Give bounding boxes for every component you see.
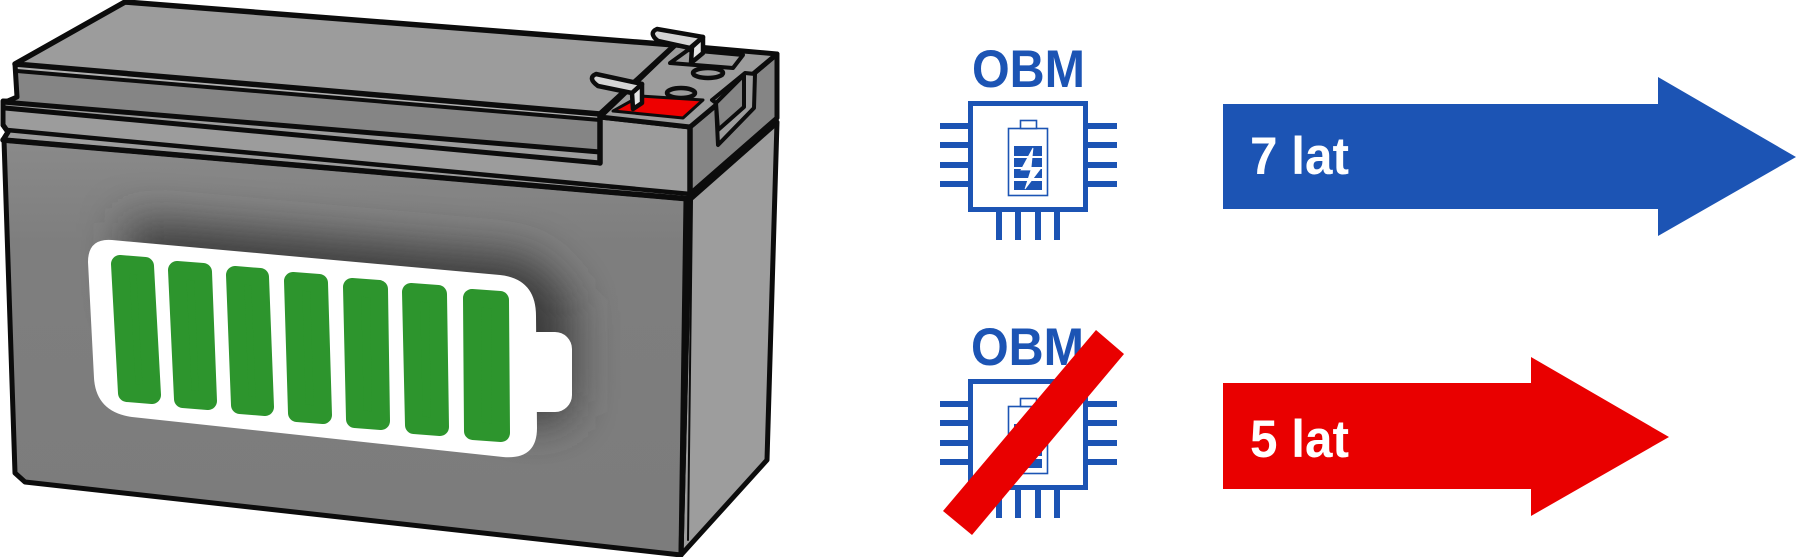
battery cells: [1014, 424, 1042, 468]
battery outline: [1008, 406, 1048, 474]
bar 7: [472, 298, 501, 433]
notch outer: [712, 73, 755, 145]
notch inner: [716, 75, 744, 130]
handle notch: [712, 73, 755, 145]
recessed strip: [3, 70, 600, 151]
OBM chip icon (crossed out): [940, 318, 1124, 535]
chip pins: [940, 123, 1117, 240]
bar 2: [177, 270, 208, 401]
lightning bolt: [1021, 148, 1041, 189]
hole back: [693, 68, 723, 78]
red arrow: 5 years: [1223, 357, 1669, 516]
red slash: [943, 330, 1124, 535]
battery right face: [681, 122, 777, 555]
ridge line: [692, 124, 777, 199]
arrow label: 7 lat: [1250, 127, 1349, 186]
symbol nub: [520, 332, 572, 412]
red positive terminal area: [613, 96, 703, 118]
hole front: [667, 88, 695, 98]
small battery icon: [1008, 398, 1048, 474]
block corner line: [687, 127, 693, 197]
lower casing line 1: [7, 130, 690, 194]
right block top: [600, 45, 777, 127]
front edge line: [681, 199, 686, 555]
heading OBM: OBM: [972, 40, 1085, 99]
right block side: [690, 54, 777, 194]
charge symbol: [88, 240, 572, 457]
bar 1: [120, 264, 152, 395]
upper lid top: [15, 2, 675, 114]
lower casing line 2: [3, 140, 690, 199]
bar 4: [293, 281, 323, 415]
left silhouette: [3, 64, 17, 140]
lid lower line: [17, 71, 600, 120]
front terminal: [592, 74, 642, 109]
chip body: [970, 104, 1086, 210]
arrow shape: [1223, 357, 1669, 516]
bar 5: [352, 287, 381, 421]
illustration: battery: [3, 2, 777, 555]
battery cells: [1014, 146, 1042, 190]
arrow shape: [1223, 77, 1796, 236]
back terminal: [653, 29, 703, 63]
strip end line: [597, 113, 603, 163]
tab: [691, 37, 703, 63]
front edge thin line: [688, 200, 692, 540]
back terminal recess: [670, 50, 743, 68]
symbol body: [88, 240, 537, 457]
light band of the casing: [3, 101, 690, 199]
heading OBM: OBM: [971, 318, 1084, 377]
arrow label: 5 lat: [1250, 410, 1349, 469]
bar 6: [411, 292, 440, 427]
small battery icon: [1008, 120, 1048, 196]
blue arrow: 7 years: [1223, 77, 1796, 236]
strip lower line 1: [3, 102, 600, 152]
battery cap: [1020, 398, 1036, 406]
strip lower line 2: [5, 108, 600, 163]
bar 3: [235, 275, 265, 407]
shadow behind charge symbol: [128, 222, 572, 425]
battery outline: [1008, 128, 1048, 196]
battery front face: [4, 140, 690, 555]
recessed strip gap: [15, 64, 600, 124]
chip body: [970, 382, 1086, 488]
tab: [632, 84, 642, 109]
green charge bars: [120, 264, 501, 433]
blade: [592, 74, 642, 93]
chip pins: [940, 401, 1117, 518]
blade: [653, 29, 703, 48]
battery cap: [1020, 120, 1036, 128]
OBM chip icon (top): [940, 40, 1117, 240]
